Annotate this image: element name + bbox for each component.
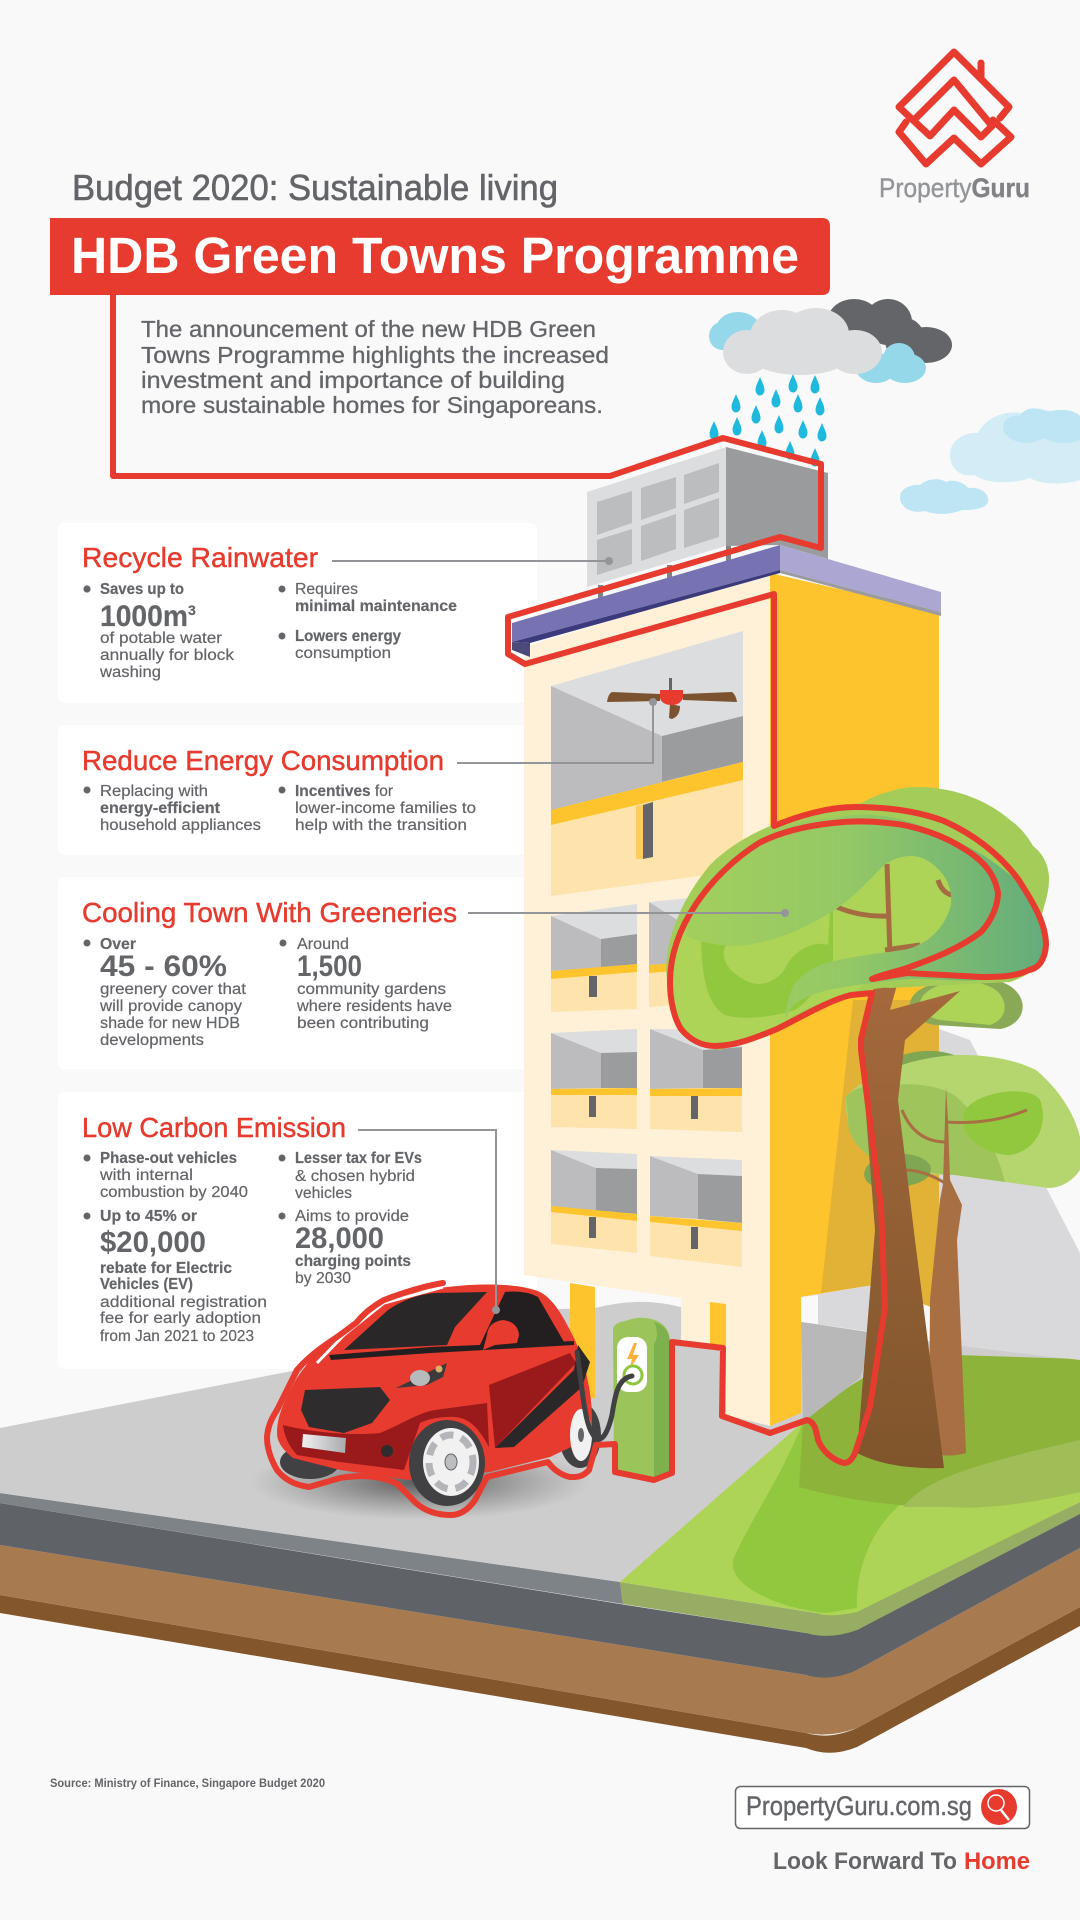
- foliage lime body: [670, 822, 998, 1046]
- ground slab: [0, 1302, 1080, 1753]
- leader line: [468, 909, 789, 917]
- column one: of potable water: [100, 630, 222, 647]
- intro text: Towns Programme highlights the increased: [141, 342, 609, 368]
- roof slab: [512, 545, 941, 657]
- icon: lightning bolt: [627, 1343, 639, 1370]
- tank panes: [597, 463, 719, 575]
- car body: [277, 1284, 592, 1480]
- kerb: [0, 1493, 623, 1604]
- windshield highlight: [317, 1287, 443, 1363]
- heading: Cooling Town With Greeneries: [82, 897, 457, 928]
- column two: been contributing: [297, 1015, 429, 1032]
- blue cloud right: [856, 343, 926, 383]
- column one: annually for block: [100, 647, 234, 664]
- column one: developments: [100, 1032, 204, 1049]
- column one: energy-efficient: [100, 800, 220, 817]
- tank legs: [598, 546, 731, 600]
- charging cable: [577, 1352, 632, 1439]
- panel: low carbon emission: [82, 1112, 500, 1345]
- dark cloud: [828, 299, 952, 363]
- column two: [278, 1150, 422, 1287]
- grass shade: [799, 1355, 1080, 1507]
- pale clouds right: [900, 408, 1080, 514]
- column two: community gardens: [297, 981, 446, 998]
- foliage knot behind trunk: [910, 978, 1023, 1029]
- column one: [84, 936, 247, 1049]
- building side: [770, 573, 939, 1426]
- back tree top shade: [860, 1051, 965, 1090]
- tree branches: [837, 864, 952, 955]
- panel: recycle rainwater: [82, 542, 613, 681]
- mirror: [483, 1320, 519, 1350]
- soil dark layer: [0, 1595, 1080, 1753]
- window row A: [551, 893, 742, 1012]
- column one: Saves up to: [100, 581, 184, 598]
- grille: [301, 1387, 390, 1433]
- car: [250, 1284, 601, 1520]
- intro text: [141, 316, 609, 418]
- heading: Reduce Energy Consumption: [82, 745, 444, 776]
- car ground shadow: [250, 1444, 590, 1520]
- intro text: investment and importance of building: [141, 367, 565, 393]
- column two: [278, 581, 457, 662]
- car lower shade: [283, 1403, 489, 1470]
- under-block shadow: [801, 1285, 873, 1332]
- column two: vehicles: [295, 1185, 352, 1202]
- column one: $20,000: [100, 1226, 206, 1259]
- title: HDB Green Towns Programme: [71, 227, 799, 284]
- column one: household appliances: [100, 817, 261, 834]
- column one: from Jan 2021 to 2023: [100, 1328, 254, 1345]
- main trunk: [857, 985, 960, 1468]
- column two: Requires: [295, 581, 358, 598]
- column one: shade for new HDB: [100, 1015, 240, 1032]
- column two: charging points: [295, 1253, 411, 1270]
- window row B: [551, 1029, 742, 1132]
- foliage gradient band: [685, 815, 1048, 1021]
- rain clouds: [709, 299, 952, 383]
- column one: Over: [100, 936, 136, 953]
- window row C: [551, 1150, 742, 1267]
- grass top: [620, 1355, 1080, 1615]
- icon: plug ring: [624, 1366, 642, 1384]
- back tree crown shade: [846, 1084, 1005, 1182]
- back tree branches: [902, 1110, 1027, 1185]
- logo mark: [899, 52, 1011, 164]
- column one: fee for early adoption: [100, 1310, 261, 1327]
- column one: additional registration: [100, 1294, 267, 1311]
- source: Source: Ministry of Finance, Singapore Budget 2020: [50, 1778, 325, 1790]
- rooftop rainwater tank: [587, 447, 828, 600]
- heading: Recycle Rainwater: [82, 542, 318, 573]
- column two: where residents have: [296, 998, 452, 1015]
- side window: [479, 1292, 564, 1347]
- far front tyre: [280, 1445, 340, 1479]
- main tree: [666, 787, 1049, 1468]
- column one: 1000m: [100, 600, 188, 633]
- column two: Lesser tax for EVs: [295, 1150, 422, 1167]
- column one: washing: [99, 664, 161, 681]
- front tyre: [409, 1420, 485, 1506]
- column one: [84, 1150, 267, 1345]
- charging station: [577, 1318, 670, 1477]
- foliage back: [666, 787, 1049, 1050]
- column two: help with the transition: [295, 817, 467, 834]
- column two: & chosen hybrid: [295, 1168, 415, 1185]
- subtitle: Budget 2020: Sustainable living: [72, 167, 558, 208]
- tree and block shadow: [821, 1000, 1080, 1360]
- tank front: [587, 447, 726, 587]
- rear hub: [570, 1409, 592, 1461]
- logo: [879, 52, 1030, 203]
- column two: Aims to provide: [295, 1208, 409, 1225]
- column two: 28,000: [295, 1222, 384, 1255]
- tank side: [726, 447, 828, 559]
- charger body: [613, 1318, 670, 1477]
- column one: Phase-out vehicles: [100, 1150, 237, 1167]
- hood band: [329, 1341, 574, 1360]
- logo wordmark: PropertyGuru: [879, 173, 1030, 203]
- card: cooling town background: [58, 877, 537, 1069]
- card: reduce energy background: [58, 725, 537, 855]
- grass lawn: [620, 1355, 1080, 1636]
- front hub: [423, 1428, 479, 1496]
- rain drops: [710, 374, 826, 466]
- foliage dark blob: [701, 911, 833, 1018]
- url text: PropertyGuru.com.sg: [746, 1791, 972, 1821]
- column two: [278, 783, 476, 834]
- back tree foliage knot: [864, 1154, 931, 1188]
- intro text: The announcement of the new HDB Green: [141, 316, 596, 342]
- rear tyre: [559, 1402, 601, 1468]
- grass shade lighter overlap: [903, 1440, 1080, 1507]
- column two: by 2030: [295, 1270, 351, 1287]
- tagline: Look Forward To: [773, 1848, 957, 1875]
- leader line: [332, 557, 613, 565]
- column one: will provide canopy: [99, 998, 242, 1015]
- building: [524, 573, 939, 1426]
- column one: with internal: [99, 1167, 193, 1184]
- foliage light blob: [724, 910, 830, 984]
- leader line: [457, 698, 657, 763]
- column one: [84, 581, 234, 681]
- red callout line: [113, 295, 1046, 1515]
- column two: minimal maintenance: [295, 598, 457, 615]
- card: recycle rainwater background: [58, 523, 537, 703]
- headlight: [396, 1363, 447, 1388]
- tagline: Home: [964, 1848, 1030, 1875]
- column two: Around: [297, 936, 349, 953]
- back tree trunk: [929, 1087, 966, 1456]
- road: [0, 1302, 1080, 1582]
- column one: rebate for Electric: [100, 1260, 232, 1277]
- intro text: more sustainable homes for Singaporeans.: [141, 392, 603, 418]
- red header banner: [50, 218, 830, 295]
- column two: lower-income families to: [295, 800, 476, 817]
- column two: 1,500: [297, 950, 362, 983]
- website badge: [736, 1786, 1030, 1828]
- under-block white gap: [801, 1295, 818, 1324]
- building front: [524, 573, 770, 1426]
- column one: 45 - 60%: [100, 950, 227, 983]
- fog light: [381, 1445, 393, 1457]
- soil layer: [0, 1545, 1080, 1735]
- charger side: [654, 1322, 670, 1477]
- column one: Vehicles (EV): [100, 1276, 193, 1293]
- card: low carbon background: [58, 1092, 537, 1369]
- back tree dark patch: [963, 1091, 1043, 1155]
- leader line: [358, 1130, 500, 1314]
- column one: 3: [188, 602, 196, 618]
- panel: reduce energy consumption: [82, 698, 657, 834]
- number plate: [302, 1434, 346, 1453]
- door shade: [489, 1353, 576, 1448]
- road shadow: [801, 1322, 875, 1422]
- column two: Lowers energy: [295, 628, 401, 645]
- heading: Low Carbon Emission: [82, 1112, 346, 1143]
- back tree: [846, 1051, 1080, 1456]
- windshield: [344, 1292, 487, 1350]
- side stripe: [495, 1345, 590, 1448]
- grey cloud: [723, 308, 882, 375]
- column one: greenery cover that: [100, 981, 247, 998]
- top-floor window: [551, 631, 743, 896]
- back tree crown: [846, 1055, 1080, 1188]
- charger panel: [617, 1337, 647, 1392]
- pillars: [570, 1283, 726, 1398]
- column two: Incentives for: [295, 783, 393, 800]
- grass bright patch: [733, 1422, 923, 1613]
- panel: cooling town with greeneries: [82, 897, 789, 1049]
- blue cloud left: [709, 312, 760, 350]
- column one: Replacing with: [100, 783, 208, 800]
- column one: Up to 45% or: [100, 1208, 197, 1225]
- icon: ceiling fan: [607, 678, 737, 719]
- column two: consumption: [295, 645, 391, 662]
- column two: [280, 936, 452, 1032]
- ground floor gap: [595, 1287, 681, 1308]
- column one: combustion by 2040: [100, 1184, 248, 1201]
- asphalt layer: [0, 1503, 1080, 1678]
- grass side: [620, 1502, 1080, 1636]
- icon: search: [981, 1789, 1017, 1825]
- column one: [84, 783, 261, 834]
